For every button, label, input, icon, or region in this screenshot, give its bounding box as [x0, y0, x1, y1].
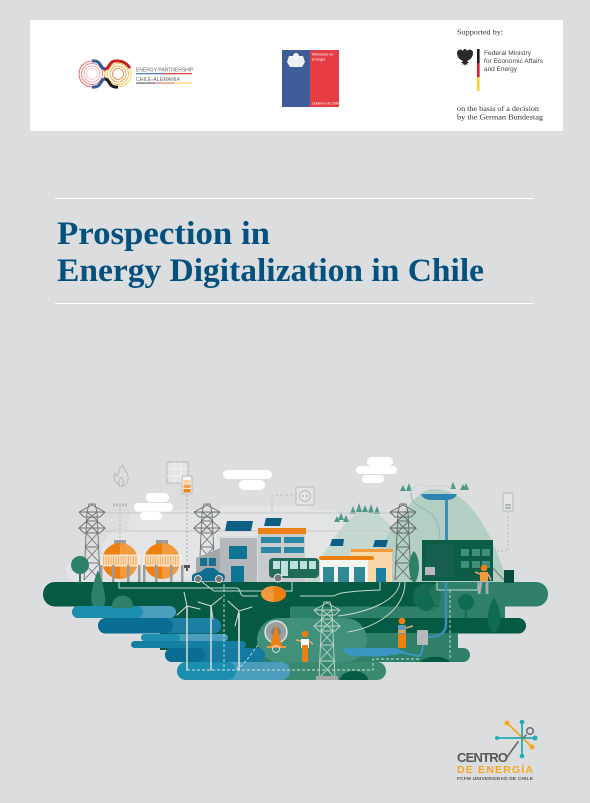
dashed cables	[187, 584, 450, 670]
title	[57, 216, 484, 289]
logo: Ministerio de Energía: Ministerio de	[312, 52, 334, 56]
logo: Ministerio de Energía: Energía	[312, 58, 326, 62]
logo: German Federal Ministry: for Economic Affairs	[484, 58, 543, 65]
horizontal power lines	[100, 513, 400, 531]
battery icon right	[496, 493, 513, 551]
hills	[305, 482, 508, 582]
decision text: on the basis of a decision	[457, 104, 539, 113]
solar panel and battery icon	[167, 462, 192, 571]
logo: Centro de Energía: FCFM UNIVERSIDAD DE CHILE	[457, 776, 534, 782]
logo: Centro de Energía: DE ENERGÍA	[457, 763, 533, 776]
title: Prospection in	[57, 216, 270, 252]
ground rows	[43, 582, 548, 680]
decision text: by the German Bundestag	[457, 112, 543, 122]
gas flame icon	[113, 465, 128, 543]
car	[192, 568, 225, 582]
worker right	[398, 618, 413, 648]
socket icon	[272, 487, 314, 512]
illustration: energy landscape	[43, 457, 548, 680]
header panel: logos	[30, 20, 563, 131]
logo: Ministerio de Energía: Gobierno de Chile	[312, 102, 339, 106]
logo: Ministerio de Energía	[282, 50, 339, 107]
logo: German Federal Ministry	[457, 49, 543, 91]
decision text	[457, 104, 543, 122]
water tower and container	[421, 494, 514, 583]
logo wordmark: CENTRO	[457, 750, 508, 765]
control wheel	[265, 621, 287, 652]
logo text: ENERGY PARTNERSHIP	[136, 68, 194, 74]
service stations	[319, 539, 393, 582]
logo: German Federal Ministry: Federal Ministry	[484, 50, 532, 57]
logo text lower: CHILE-ALEMANIA	[136, 77, 180, 83]
clouds	[134, 457, 397, 520]
logo: Energy Partnership Chile-Alemania	[79, 61, 194, 87]
title: Energy Digitalization in Chile	[57, 253, 484, 289]
supported by text: Supported by:	[457, 28, 503, 36]
worker left	[296, 631, 313, 662]
pylons	[79, 504, 105, 580]
wind turbines	[177, 592, 252, 670]
bus	[269, 558, 319, 582]
faint background clouds	[66, 506, 343, 582]
underground pipes	[119, 582, 478, 632]
water rows	[72, 606, 290, 680]
gas spheres	[100, 540, 184, 582]
worker on container	[475, 565, 491, 594]
buildings	[196, 518, 306, 582]
logo: German Federal Ministry: and Energy	[484, 66, 518, 73]
trees	[71, 551, 500, 633]
meter and pond	[343, 582, 446, 657]
orange tank	[261, 586, 286, 602]
logo: Centro de Energía	[457, 720, 538, 782]
